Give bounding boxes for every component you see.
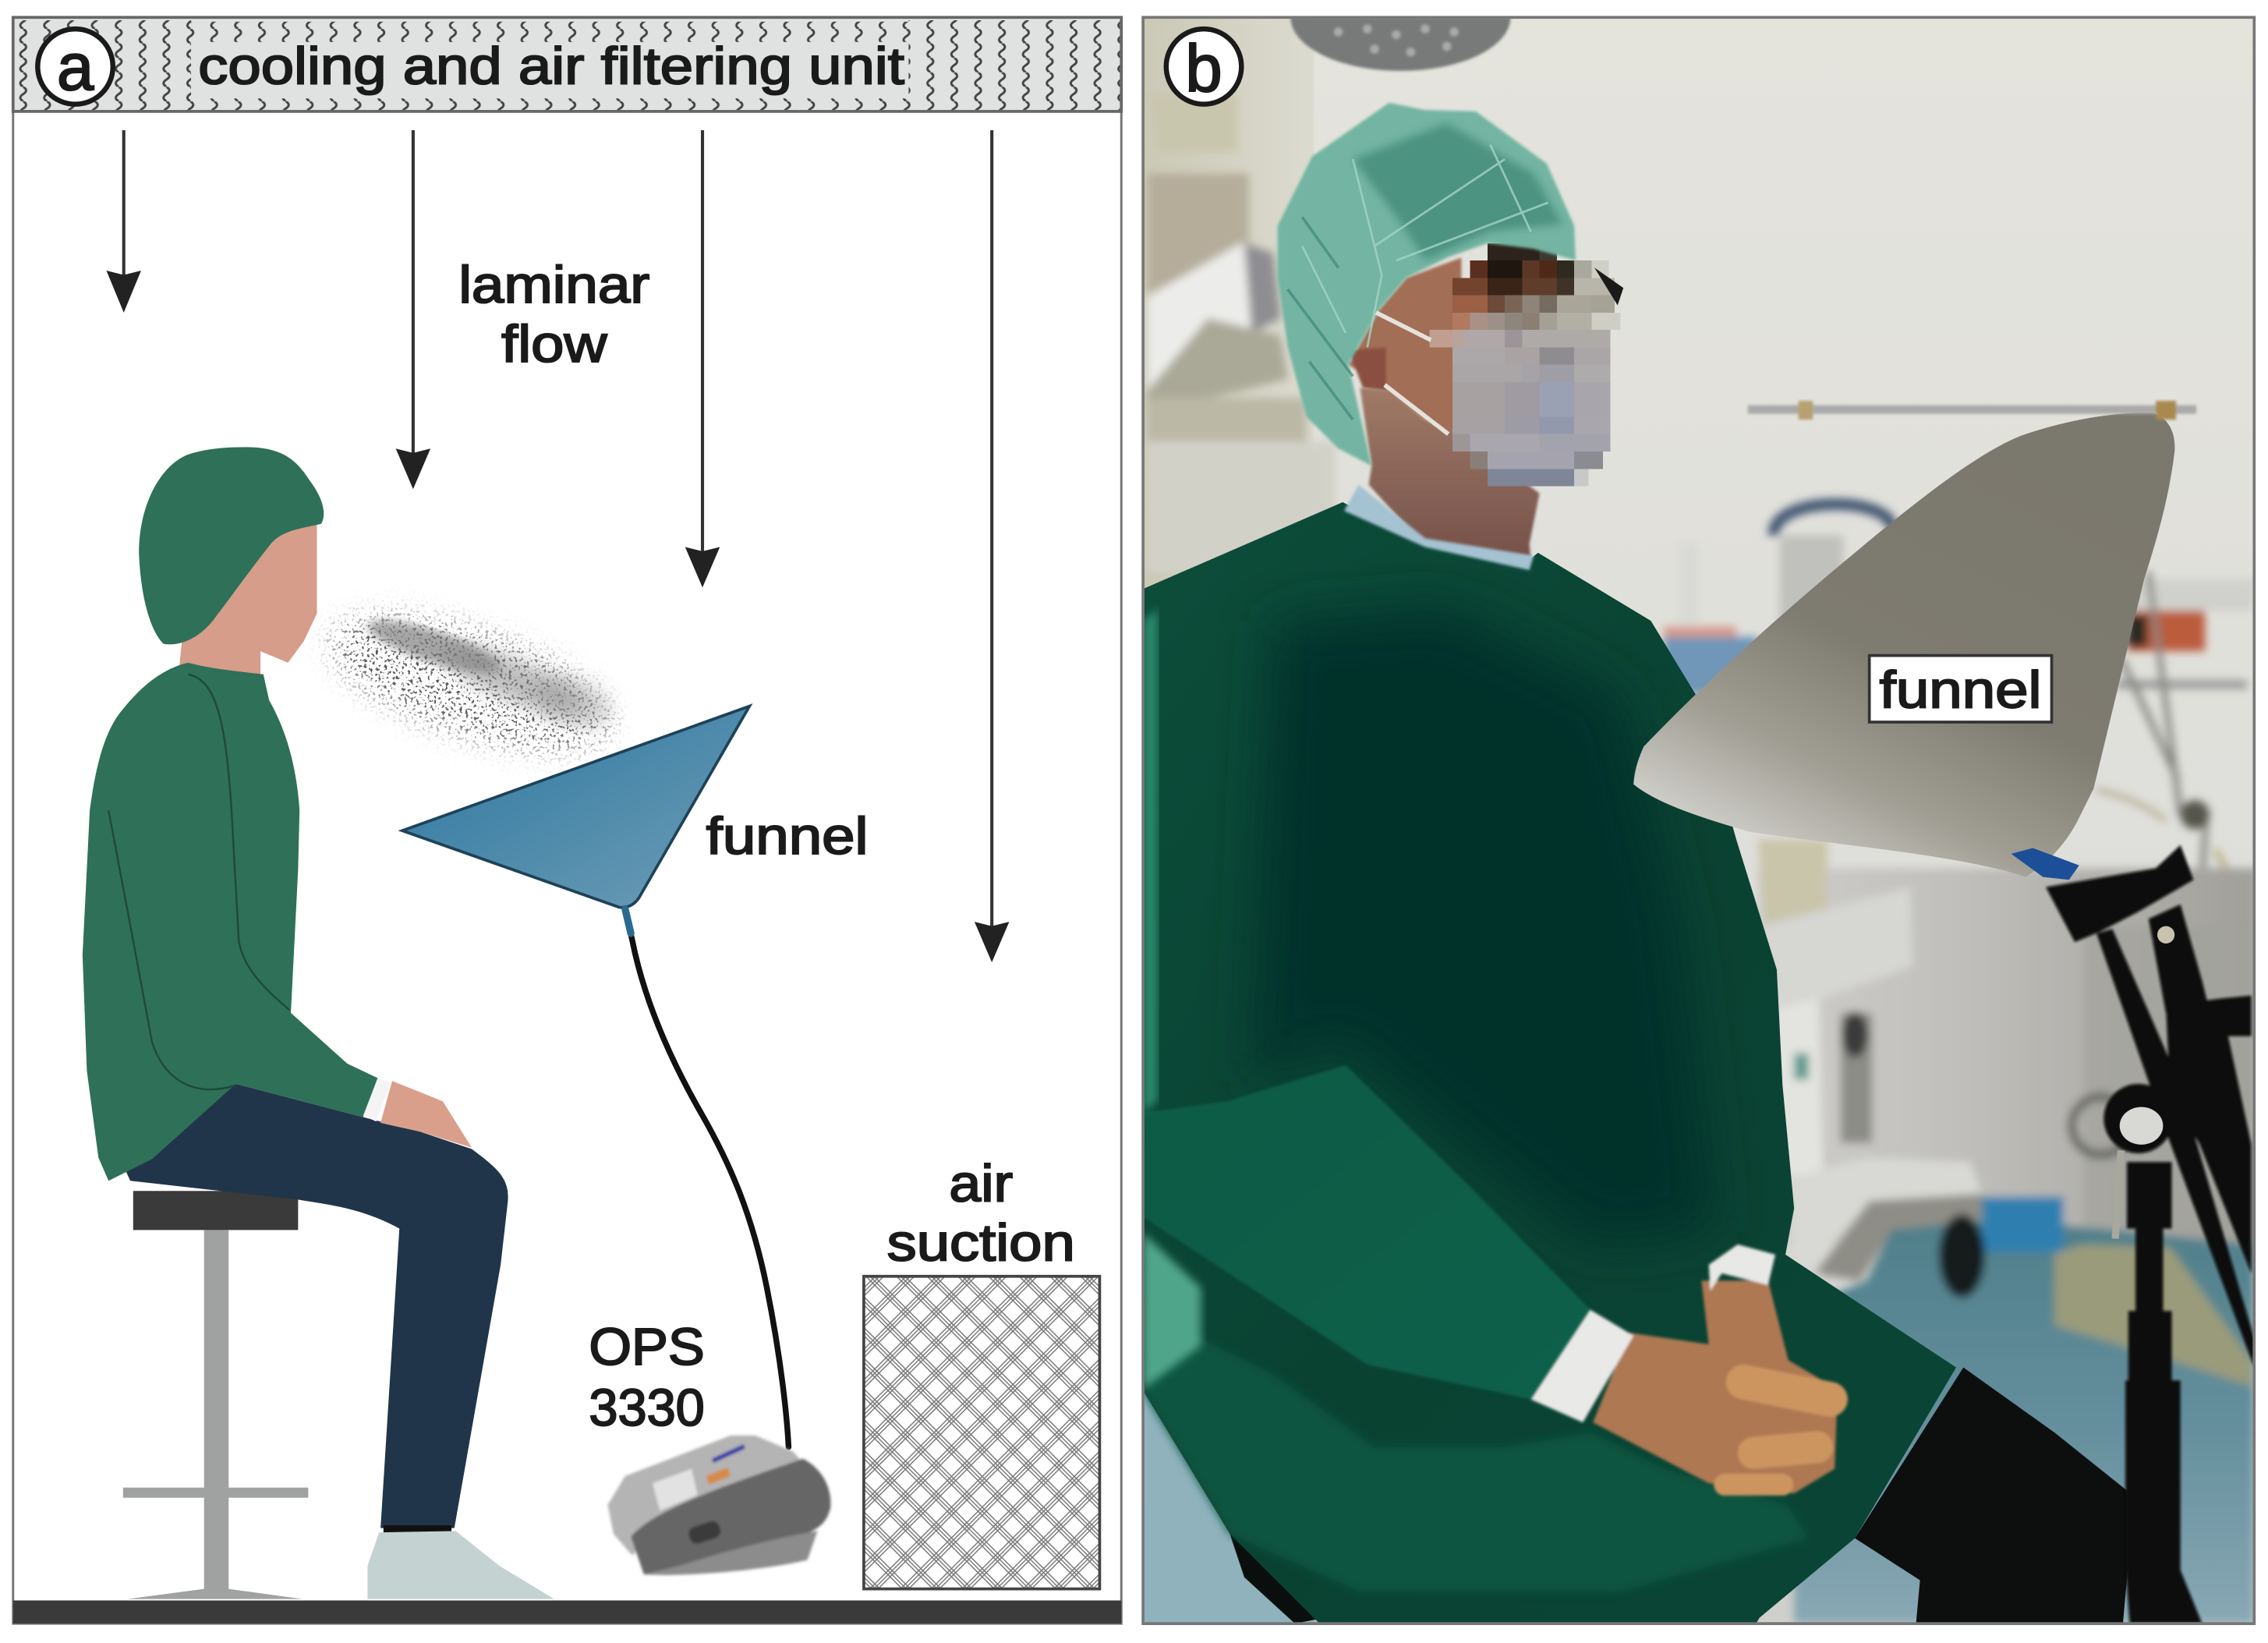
background equipment	[1148, 94, 2257, 1624]
air suction grille	[864, 1277, 1099, 1589]
panel b: photograph	[1143, 0, 2257, 1628]
microphone stand	[2046, 845, 2254, 1624]
funnel	[402, 706, 749, 908]
neck and face	[178, 524, 317, 683]
hands	[1530, 1245, 1838, 1493]
background wall	[1143, 17, 2254, 1624]
gown	[1143, 502, 1956, 1628]
arrow 3	[685, 130, 720, 587]
neck	[1360, 388, 1540, 558]
laminar flow label: flow	[501, 316, 607, 374]
surgical cap	[1278, 103, 1576, 466]
mask straps	[1376, 313, 1449, 434]
lamp	[1289, 19, 1513, 73]
blue collar	[1344, 485, 1534, 570]
OPS 3330 label: OPS	[589, 1319, 705, 1376]
photo funnel	[1633, 413, 2174, 880]
rod	[1748, 401, 2196, 420]
air suction label: suction	[887, 1214, 1075, 1272]
shoe	[384, 1525, 451, 1532]
funnel label box	[1870, 656, 2051, 722]
label a badge: a	[57, 30, 94, 104]
funnel label box: funnel	[1880, 661, 2042, 719]
person seated	[83, 447, 554, 1599]
label a badge	[37, 29, 113, 104]
label b badge: b	[1185, 32, 1222, 106]
label b badge	[1166, 29, 1241, 106]
air suction label: air	[949, 1155, 1013, 1213]
OPS 3330 device	[607, 1436, 830, 1575]
OPS 3330 label	[589, 1319, 705, 1437]
cuff	[363, 1078, 391, 1121]
floor left	[1143, 1390, 1324, 1628]
glasses arm	[1594, 267, 1623, 306]
panel b frame	[1143, 17, 2254, 1624]
cooling and air filtering unit: cooling and air filtering unit	[198, 38, 904, 96]
sleeve highlight	[1143, 1065, 1590, 1399]
laminar flow label	[458, 257, 649, 374]
dark seat legs	[1230, 1535, 1316, 1622]
trousers	[123, 1084, 508, 1528]
gown shadow	[1251, 607, 1714, 1245]
laminar flow label: laminar	[458, 257, 649, 314]
panel a: experimental schematic	[13, 17, 1121, 1624]
sweater	[83, 663, 377, 1181]
air suction label	[887, 1155, 1075, 1272]
arrow 4	[975, 130, 1009, 962]
OPS 3330 label: 3330	[589, 1379, 705, 1437]
aerosol cloud	[314, 588, 627, 778]
pixelated face	[1430, 243, 1620, 487]
head skin	[1349, 257, 1461, 434]
stool	[123, 1191, 308, 1599]
arrow 1	[106, 130, 141, 313]
black trouser leg	[1855, 1368, 2134, 1628]
hair cap	[139, 447, 324, 644]
arrow 2	[396, 130, 430, 489]
sampling tube	[625, 908, 788, 1447]
cooling and air filtering unit	[13, 17, 1121, 112]
hand	[380, 1081, 472, 1148]
shoe upper	[367, 1531, 554, 1599]
floor	[13, 1600, 1121, 1624]
funnel label: funnel	[706, 808, 869, 866]
stand knob	[2115, 926, 2174, 1239]
